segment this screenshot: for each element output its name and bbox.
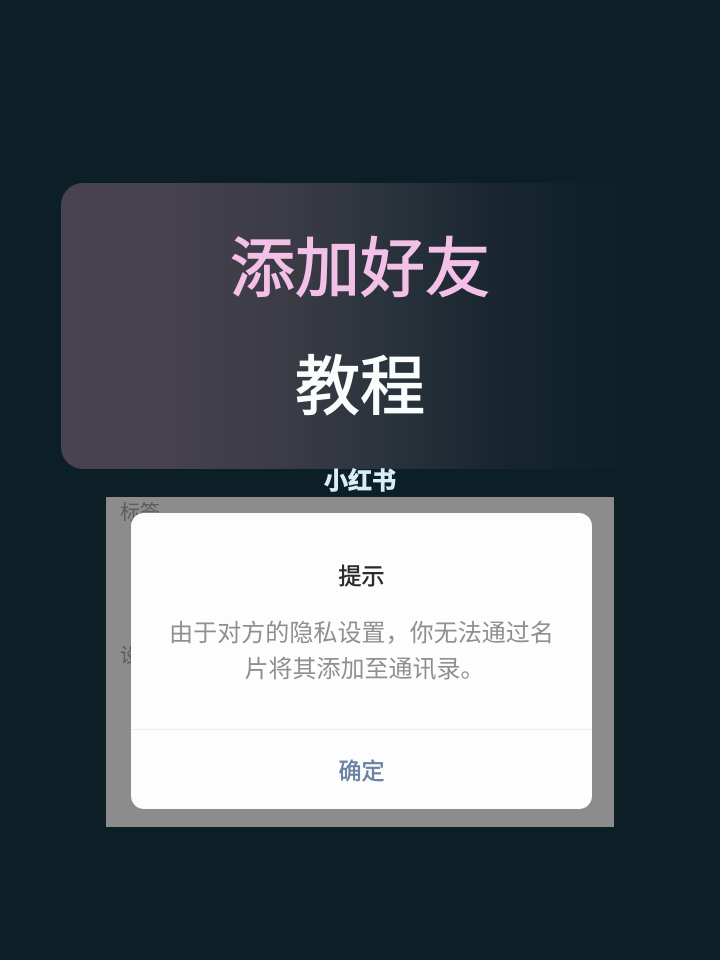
dialog xyxy=(131,513,592,809)
confirm button: 确定 xyxy=(338,758,384,784)
title panel xyxy=(61,183,641,469)
heading: tutorial: 教程 xyxy=(295,350,425,423)
heading: add friends: 添加好友 xyxy=(230,232,490,305)
dialog title: 提示 xyxy=(338,563,384,589)
screenshot panel xyxy=(106,497,614,827)
dialog divider xyxy=(131,729,592,730)
background label: settings: 设 xyxy=(120,645,140,667)
watermark: 小红书 xyxy=(324,468,396,495)
background label: tags: 标签 xyxy=(120,502,160,524)
dialog message xyxy=(169,620,554,683)
dialog message: 片将其添加至通讯录。 xyxy=(244,656,484,683)
dialog message: 由于对方的隐私设置，你无法通过名 xyxy=(169,620,554,647)
